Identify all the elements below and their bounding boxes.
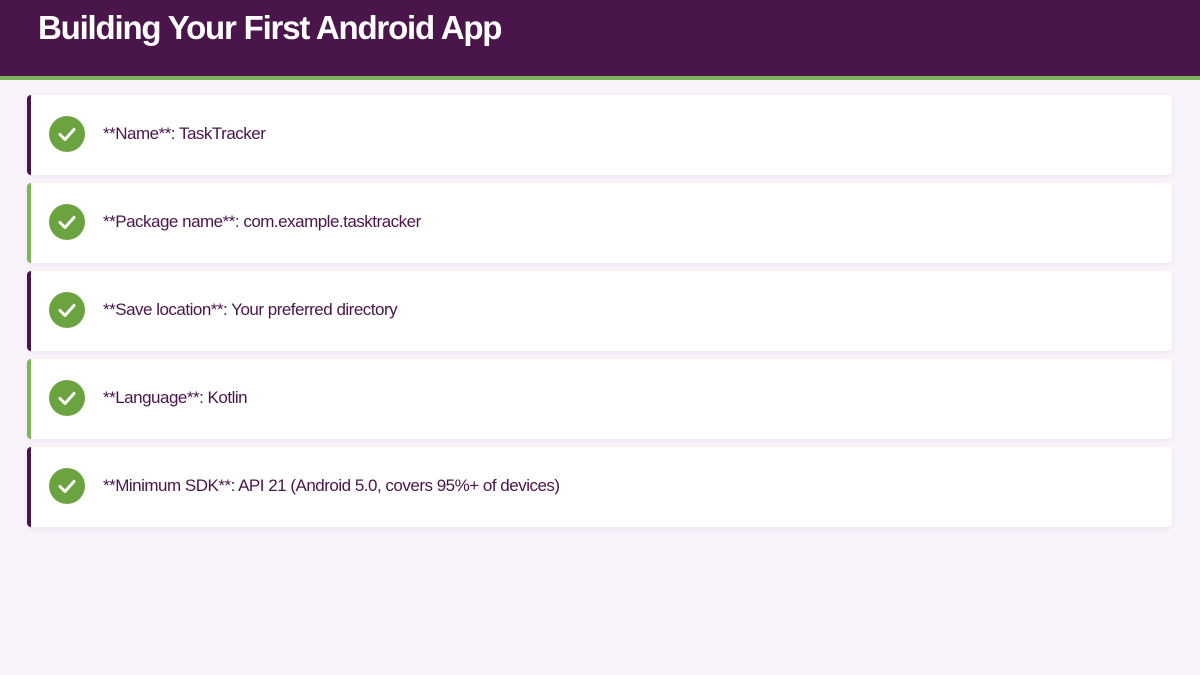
- card: language: [27, 359, 1172, 439]
- card: name: [27, 95, 1172, 175]
- card: package: [27, 183, 1172, 263]
- icon: check: [49, 380, 85, 416]
- title: Building Your First Android App: [38, 9, 501, 46]
- card: minimum sdk: [27, 447, 1172, 527]
- text: **Language**: Kotlin: [103, 388, 247, 407]
- text: **Package name**: com.example.tasktracker: [103, 212, 421, 231]
- icon: check: [49, 204, 85, 240]
- header: [0, 0, 1200, 80]
- icon: check: [49, 116, 85, 152]
- text: **Minimum SDK**: API 21 (Android 5.0, covers 95%+ of devices): [103, 476, 560, 495]
- icon: check: [49, 468, 85, 504]
- text: **Save location**: Your preferred directory: [103, 300, 397, 319]
- card: save location: [27, 271, 1172, 351]
- text: **Name**: TaskTracker: [103, 124, 265, 143]
- icon: check: [49, 292, 85, 328]
